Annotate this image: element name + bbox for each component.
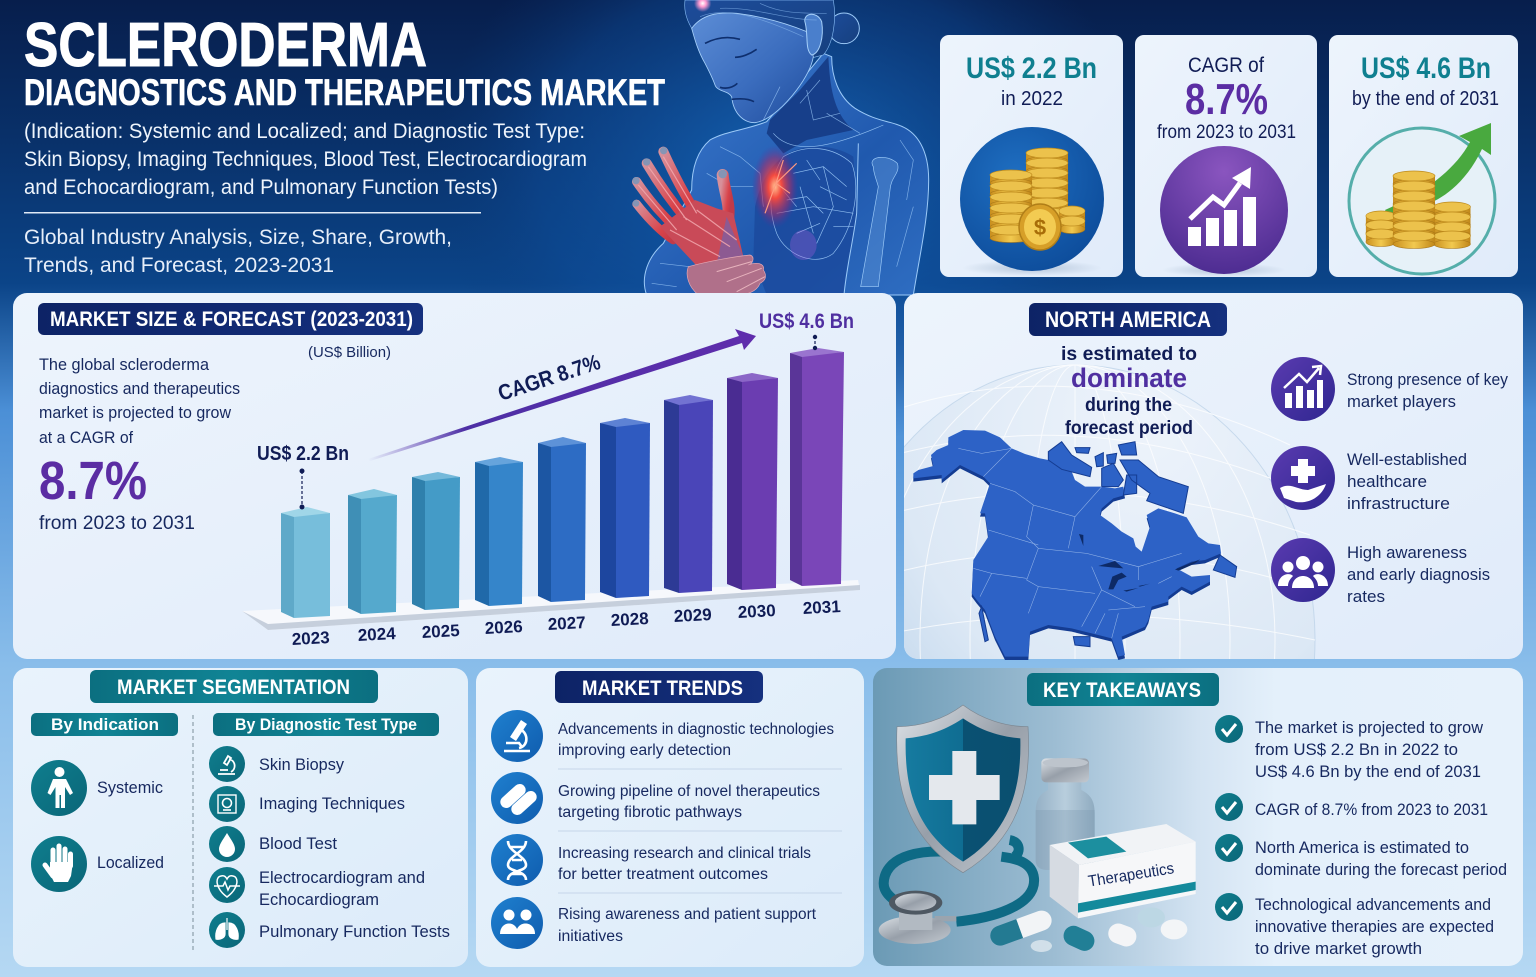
title block: SCLERODERMA <box>24 11 427 80</box>
sub-heading: by indication: By Indication <box>51 715 159 734</box>
market description: The global scleroderma <box>39 356 210 374</box>
panel: North America <box>904 293 1523 660</box>
heading: key takeaways: KEY TAKEAWAYS <box>1043 679 1201 702</box>
driver: healthcare infrastructure <box>1271 446 1467 513</box>
item: ECG: Electrocardiogram and <box>259 869 425 887</box>
year labels: 2029 <box>673 605 712 626</box>
driver: early diagnosis: and early diagnosis <box>1347 566 1490 584</box>
year labels: 2027 <box>547 613 586 634</box>
trend: clinical trials <box>491 834 811 886</box>
heading: North America: NORTH AMERICA <box>1045 307 1211 332</box>
item: systemic: Systemic <box>97 779 163 797</box>
trend: novel therapeutics: targeting fibrotic pathways <box>558 804 742 821</box>
vial <box>1036 758 1095 870</box>
title block: and Echocardiogram, and Pulmonary Function Tests) <box>24 175 498 199</box>
shield <box>897 705 1029 873</box>
takeaway: growth <box>1215 715 1483 781</box>
stat card: 2022 market size <box>940 35 1123 277</box>
takeaway: CAGR <box>1215 793 1488 821</box>
bar chart <box>242 310 860 649</box>
takeaway: technology <box>1215 893 1494 958</box>
dominance statement: during the <box>1085 395 1172 416</box>
driver: early diagnosis <box>1271 538 1490 606</box>
bar chart: (US$ Billion) <box>308 344 391 361</box>
takeaway: growth: US$ 4.6 Bn by the end of 2031 <box>1255 763 1481 781</box>
stat card: 2031 market size: by the end of 2031 <box>1352 88 1499 110</box>
item: ECG: Echocardiogram <box>259 891 379 909</box>
item: imaging: Imaging Techniques <box>259 795 405 813</box>
driver: healthcare infrastructure: Well-established <box>1347 451 1467 469</box>
stat card: 2022 market size: US$ 2.2 Bn <box>966 52 1097 85</box>
item: blood test <box>209 826 337 862</box>
driver: early diagnosis: High awareness <box>1347 544 1467 562</box>
market description: from 2023 to 2031 <box>39 513 195 534</box>
panel: market trends <box>476 668 864 967</box>
dominance statement <box>1061 344 1197 439</box>
title block: DIAGNOSTICS AND THERAPEUTICS MARKET <box>24 72 665 113</box>
heading: trends <box>555 671 763 703</box>
heading: trends: MARKET TRENDS <box>582 677 743 700</box>
heading: segmentation <box>90 670 378 703</box>
trend: clinical trials: for better treatment outcomes <box>558 866 768 883</box>
illustration: woman with scleroderma <box>632 0 929 295</box>
market description: at a CAGR of <box>39 429 133 447</box>
title block: Global Industry Analysis, Size, Share, Growth, <box>24 225 452 249</box>
item: blood test: Blood Test <box>259 835 337 853</box>
trend: patient support <box>491 897 817 949</box>
title block: Trends, and Forecast, 2023-2031 <box>24 253 334 277</box>
item: localized <box>31 836 164 892</box>
CAGR label: CAGR 8.7% <box>495 349 603 406</box>
icon: coins with green arrow <box>1349 123 1495 274</box>
takeaway: North America: dominate during the forecast period <box>1255 861 1507 879</box>
year labels: 2024 <box>357 624 397 645</box>
icon: growth chart on purple circle <box>1160 146 1288 277</box>
trend: patient support: Rising awareness and patient support <box>558 906 817 923</box>
driver: key market players: market players <box>1347 393 1456 411</box>
title block: (Indication: Systemic and Localized; and Diagnostic Test Type: <box>24 119 585 143</box>
panel: key takeaways <box>873 668 1523 966</box>
item: skin biopsy: Skin Biopsy <box>259 756 345 774</box>
takeaway: growth: The market is projected to grow <box>1255 719 1483 737</box>
trend: novel therapeutics <box>491 772 820 824</box>
item: ECG <box>209 867 425 909</box>
therapeutics box <box>1050 824 1196 918</box>
stat card: CAGR: CAGR of <box>1188 54 1264 77</box>
driver: early diagnosis: rates <box>1347 588 1385 606</box>
heading: segmentation: MARKET SEGMENTATION <box>117 676 350 699</box>
dominance statement: dominate <box>1071 363 1187 393</box>
panel: market size and forecast <box>13 293 896 659</box>
item: localized: Localized <box>97 854 164 872</box>
capsules and tablets <box>987 907 1187 954</box>
heading: North America <box>1029 303 1227 336</box>
item: pulmonary function: Pulmonary Function Tests <box>259 923 450 941</box>
trend: novel therapeutics: Growing pipeline of novel therapeutics <box>558 783 820 800</box>
takeaway: technology: Technological advancements and <box>1255 896 1491 914</box>
globe grid <box>904 364 1316 659</box>
year labels: 2025 <box>421 621 460 642</box>
icon: gold coins on blue circle: $ <box>1034 215 1046 240</box>
stat card: CAGR: 8.7% <box>1185 75 1268 124</box>
driver: key market players <box>1271 357 1509 421</box>
value callout 2022: US$ 2.2 Bn <box>257 443 349 465</box>
illustration: healthcare products <box>879 705 1196 954</box>
trend: diagnostic technologies: Advancements in diagnostic technologies <box>558 721 834 738</box>
trend: diagnostic technologies <box>491 710 834 762</box>
market description: market is projected to grow <box>39 404 231 422</box>
item: systemic <box>31 760 163 816</box>
dominance statement: forecast period <box>1065 418 1193 439</box>
stethoscope <box>879 840 1034 944</box>
takeaway: growth: from US$ 2.2 Bn in 2022 to <box>1255 741 1458 759</box>
title block: Skin Biopsy, Imaging Techniques, Blood Test, Electrocardiogram <box>24 147 587 171</box>
takeaway: CAGR: CAGR of 8.7% from 2023 to 2031 <box>1255 801 1488 819</box>
year labels: 2031 <box>802 597 841 618</box>
driver: healthcare infrastructure: infrastructure <box>1347 495 1450 513</box>
stat card: CAGR <box>1135 35 1317 277</box>
value callout 2031 <box>759 310 854 350</box>
takeaway: North America <box>1215 834 1507 879</box>
therapeutics box: Therapeutics <box>1087 860 1175 891</box>
year labels: 2028 <box>610 609 649 630</box>
arrow: growth trend <box>368 329 756 461</box>
stat card: 2022 market size: in 2022 <box>1001 88 1063 110</box>
year labels <box>291 597 841 649</box>
title block <box>24 11 665 277</box>
year labels: 2026 <box>484 617 523 638</box>
takeaway: North America: North America is estimated to <box>1255 839 1469 857</box>
value callout 2022 <box>257 443 349 510</box>
market description: 8.7% <box>39 451 147 511</box>
trend: clinical trials: Increasing research and clinical trials <box>558 845 811 862</box>
item: imaging <box>209 786 405 822</box>
trend: patient support: initiatives <box>558 928 623 945</box>
takeaway: technology: innovative therapies are expected <box>1255 918 1494 936</box>
map: North America <box>913 430 1237 660</box>
stat card: 2031 market size: US$ 4.6 Bn <box>1361 52 1491 85</box>
year labels: 2023 <box>291 628 330 649</box>
takeaway: technology: to drive market growth <box>1255 940 1422 958</box>
driver: key market players: Strong presence of key <box>1347 371 1509 389</box>
sub-heading: by test type: By Diagnostic Test Type <box>235 715 417 734</box>
market description: diagnostics and therapeutics <box>39 380 240 398</box>
driver: healthcare infrastructure: healthcare <box>1347 473 1427 491</box>
trend: diagnostic technologies: improving early detection <box>558 742 731 759</box>
value callout 2031: US$ 4.6 Bn <box>759 310 854 333</box>
stat card: CAGR: from 2023 to 2031 <box>1157 122 1296 143</box>
icon: gold coins on blue circle <box>960 127 1104 276</box>
heading: market size <box>38 303 423 335</box>
market description <box>39 356 240 534</box>
year labels: 2030 <box>737 601 776 622</box>
item: skin biopsy <box>209 746 345 782</box>
sub-heading: by indication <box>31 713 178 736</box>
heading: market size: MARKET SIZE & FORECAST (2023-2031) <box>50 308 413 331</box>
dominance statement: is estimated to <box>1061 344 1197 365</box>
item: pulmonary function <box>209 912 450 948</box>
stat card: 2031 market size <box>1329 35 1518 277</box>
heading: key takeaways <box>1027 673 1219 706</box>
panel: market segmentation <box>13 668 468 967</box>
